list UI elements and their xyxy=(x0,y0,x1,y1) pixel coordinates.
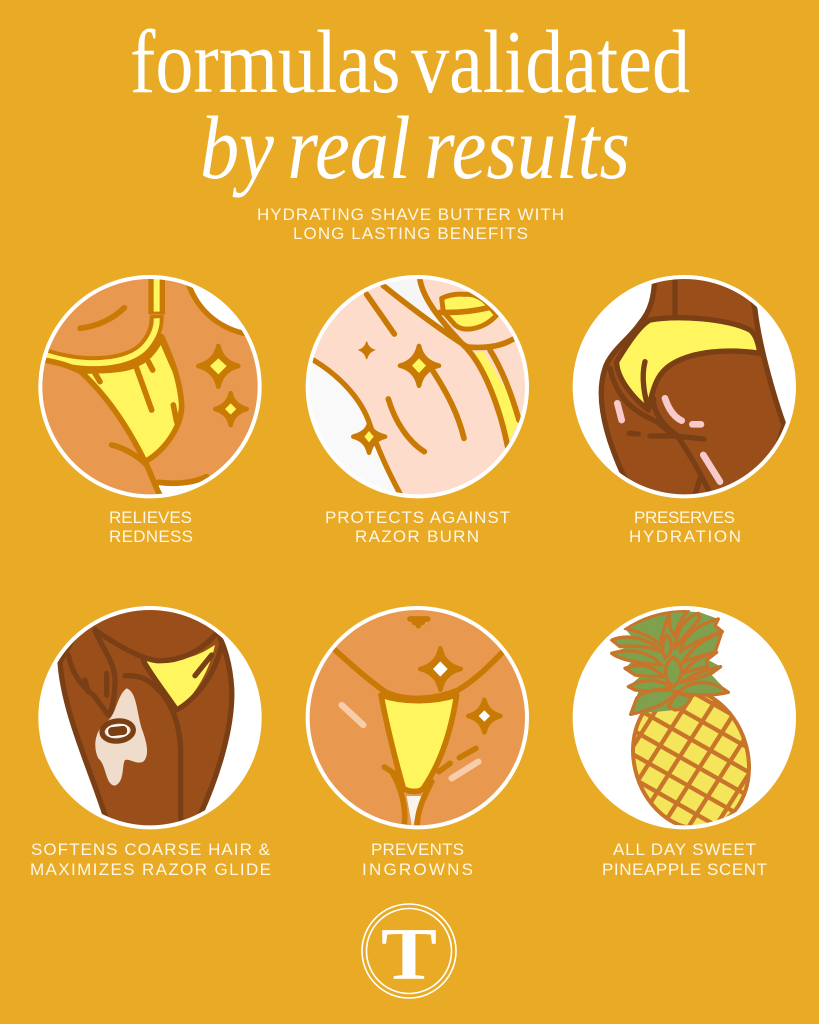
panel: pineapple scent xyxy=(572,606,796,875)
subtitle xyxy=(257,205,564,243)
label: PINEAPPLE SCENT xyxy=(602,860,767,879)
label: PRESERVES xyxy=(634,508,735,527)
label: PROTECTS AGAINST xyxy=(325,508,510,527)
label xyxy=(325,508,510,546)
subtitle: HYDRATING SHAVE BUTTER WITH xyxy=(257,205,564,224)
label: RELIEVES xyxy=(109,508,192,527)
icon: skin with yellow bikini and sparkles xyxy=(38,275,262,498)
label: HYDRATION xyxy=(629,527,741,546)
logo xyxy=(362,904,456,998)
panel: softens coarse hair xyxy=(30,595,280,879)
subtitle: LONG LASTING BENEFITS xyxy=(293,224,528,243)
label xyxy=(602,840,767,879)
label: INGROWNS xyxy=(362,860,473,879)
icon: pineapple xyxy=(572,606,796,830)
label: REDNESS xyxy=(109,527,193,546)
panel: prevents ingrowns xyxy=(306,606,529,875)
label xyxy=(362,840,473,879)
label: PREVENTS xyxy=(371,840,464,859)
title xyxy=(130,13,690,198)
icon: pale skin with sparkles xyxy=(306,275,529,498)
icon: dark skin with razor and shave butter xyxy=(38,606,262,830)
label xyxy=(629,508,741,546)
label xyxy=(30,840,271,879)
label: SOFTENS COARSE HAIR & xyxy=(31,840,271,859)
panel: protects against razor burn xyxy=(306,275,529,542)
logo: T xyxy=(381,914,437,996)
label: MAXIMIZES RAZOR GLIDE xyxy=(30,860,271,879)
label xyxy=(109,508,193,546)
title: by real results xyxy=(200,99,630,198)
icon: front view with bikini and sparkles xyxy=(306,606,529,830)
icon: dark skin rear view xyxy=(572,275,796,498)
panel: relieves redness xyxy=(38,275,262,542)
panel: preserves hydration xyxy=(572,275,796,542)
label: RAZOR BURN xyxy=(355,527,479,546)
label: ALL DAY SWEET xyxy=(613,840,756,859)
title: formulas validated xyxy=(130,13,690,112)
